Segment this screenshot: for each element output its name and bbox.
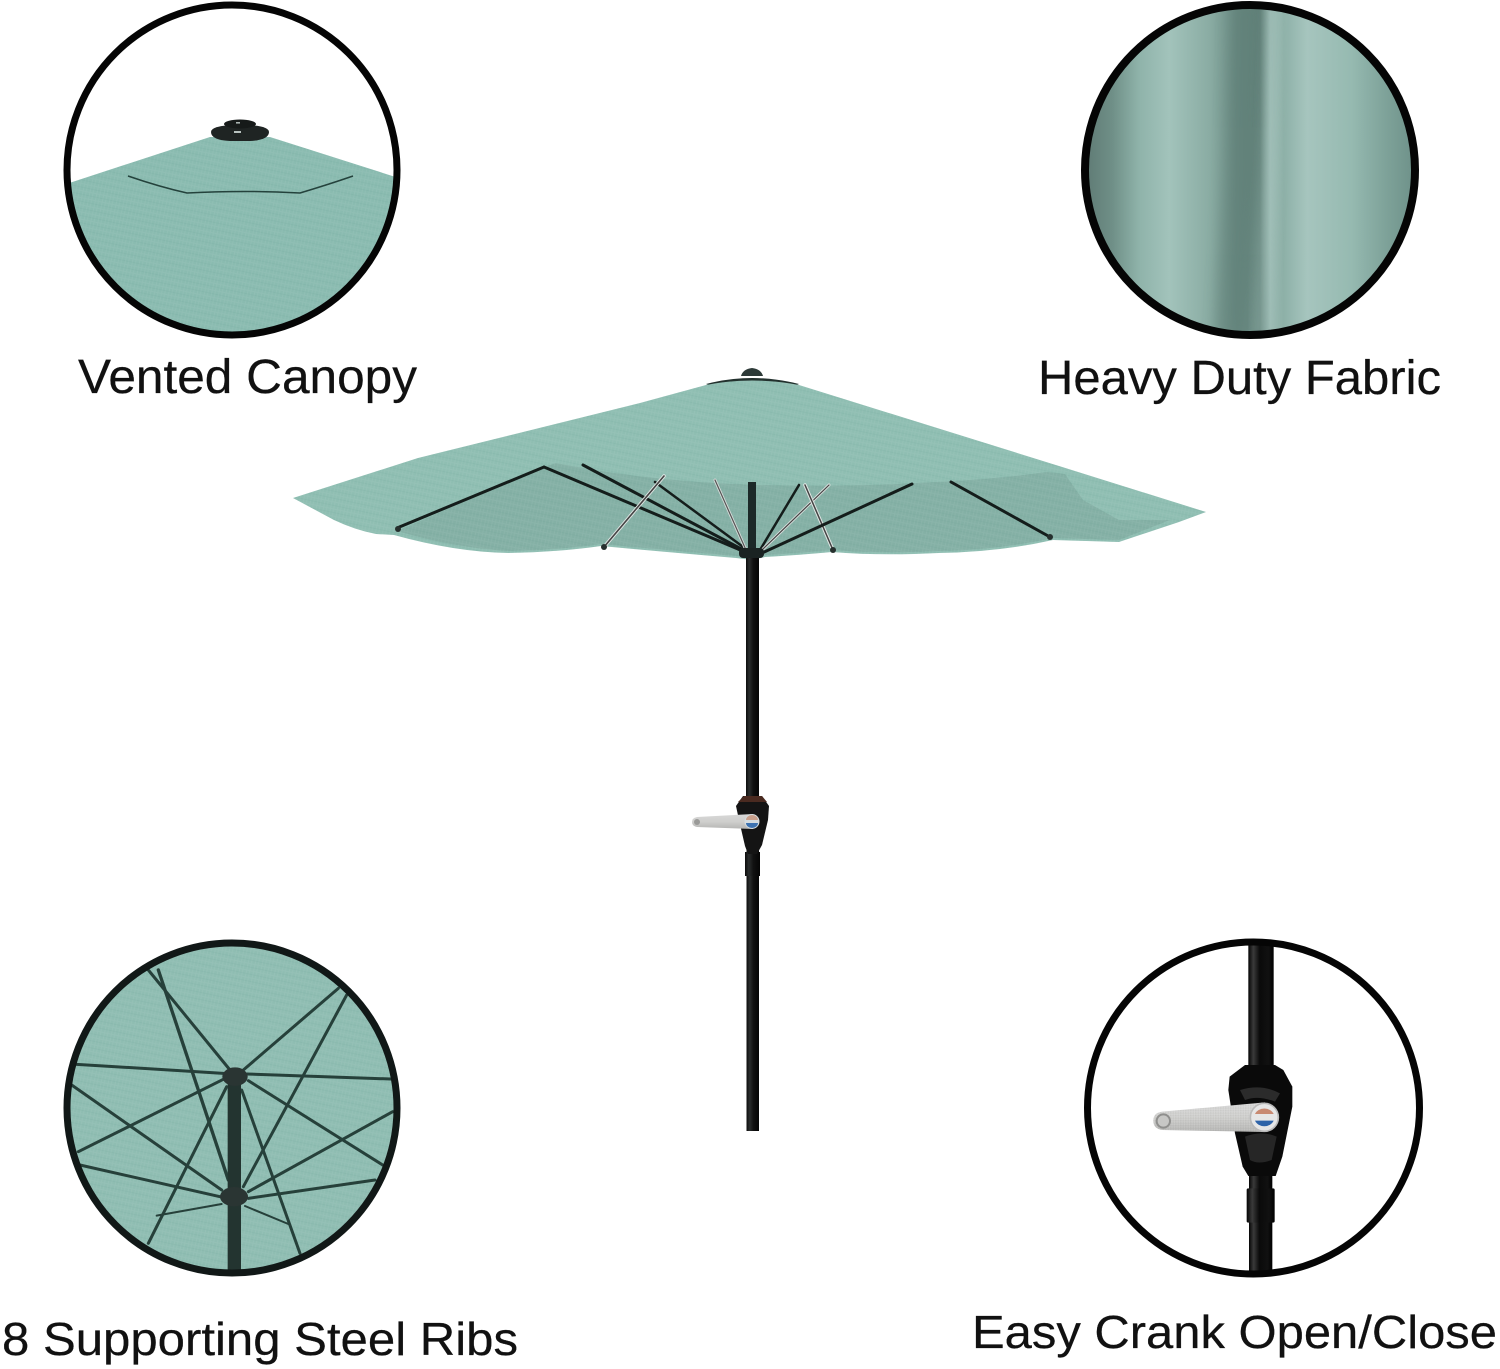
crank pole [1248, 943, 1274, 1067]
rib tips [395, 526, 1053, 553]
canopy fabric close-up [71, 137, 394, 332]
supporting ribs [72, 970, 393, 1253]
canopy silhouette [293, 380, 1206, 560]
panel: crank detail circle [1088, 942, 1420, 1274]
lower hub [739, 548, 764, 558]
panel: steel ribs detail circle [60, 935, 405, 1280]
label: easy crank: Easy Crank Open/Close [972, 1306, 1497, 1358]
steel ribs [397, 465, 1050, 553]
label: supporting steel ribs: 8 Supporting Steel Ribs [2, 1313, 518, 1365]
fabric folds close-up [1082, 2, 1418, 338]
main umbrella illustration [293, 368, 1206, 1131]
crank housing [1228, 1065, 1292, 1176]
label: vented canopy: Vented Canopy [78, 351, 417, 404]
canopy interior shade [397, 463, 1170, 558]
panel: heavy duty fabric detail circle [1082, 0, 1418, 340]
crank housing [736, 796, 769, 854]
canopy finial [741, 368, 763, 376]
crank handle [692, 814, 753, 829]
vent opening line [128, 176, 353, 193]
pole [748, 482, 756, 554]
centre pole and hubs [220, 1067, 248, 1277]
icon: canopy finial [211, 120, 269, 141]
panel: vented canopy detail circle [60, 5, 405, 345]
label: heavy duty fabric: Heavy Duty Fabric [1038, 352, 1441, 405]
crank handle [1153, 1102, 1265, 1132]
vent flap [706, 378, 799, 388]
underside fabric [70, 946, 394, 1270]
